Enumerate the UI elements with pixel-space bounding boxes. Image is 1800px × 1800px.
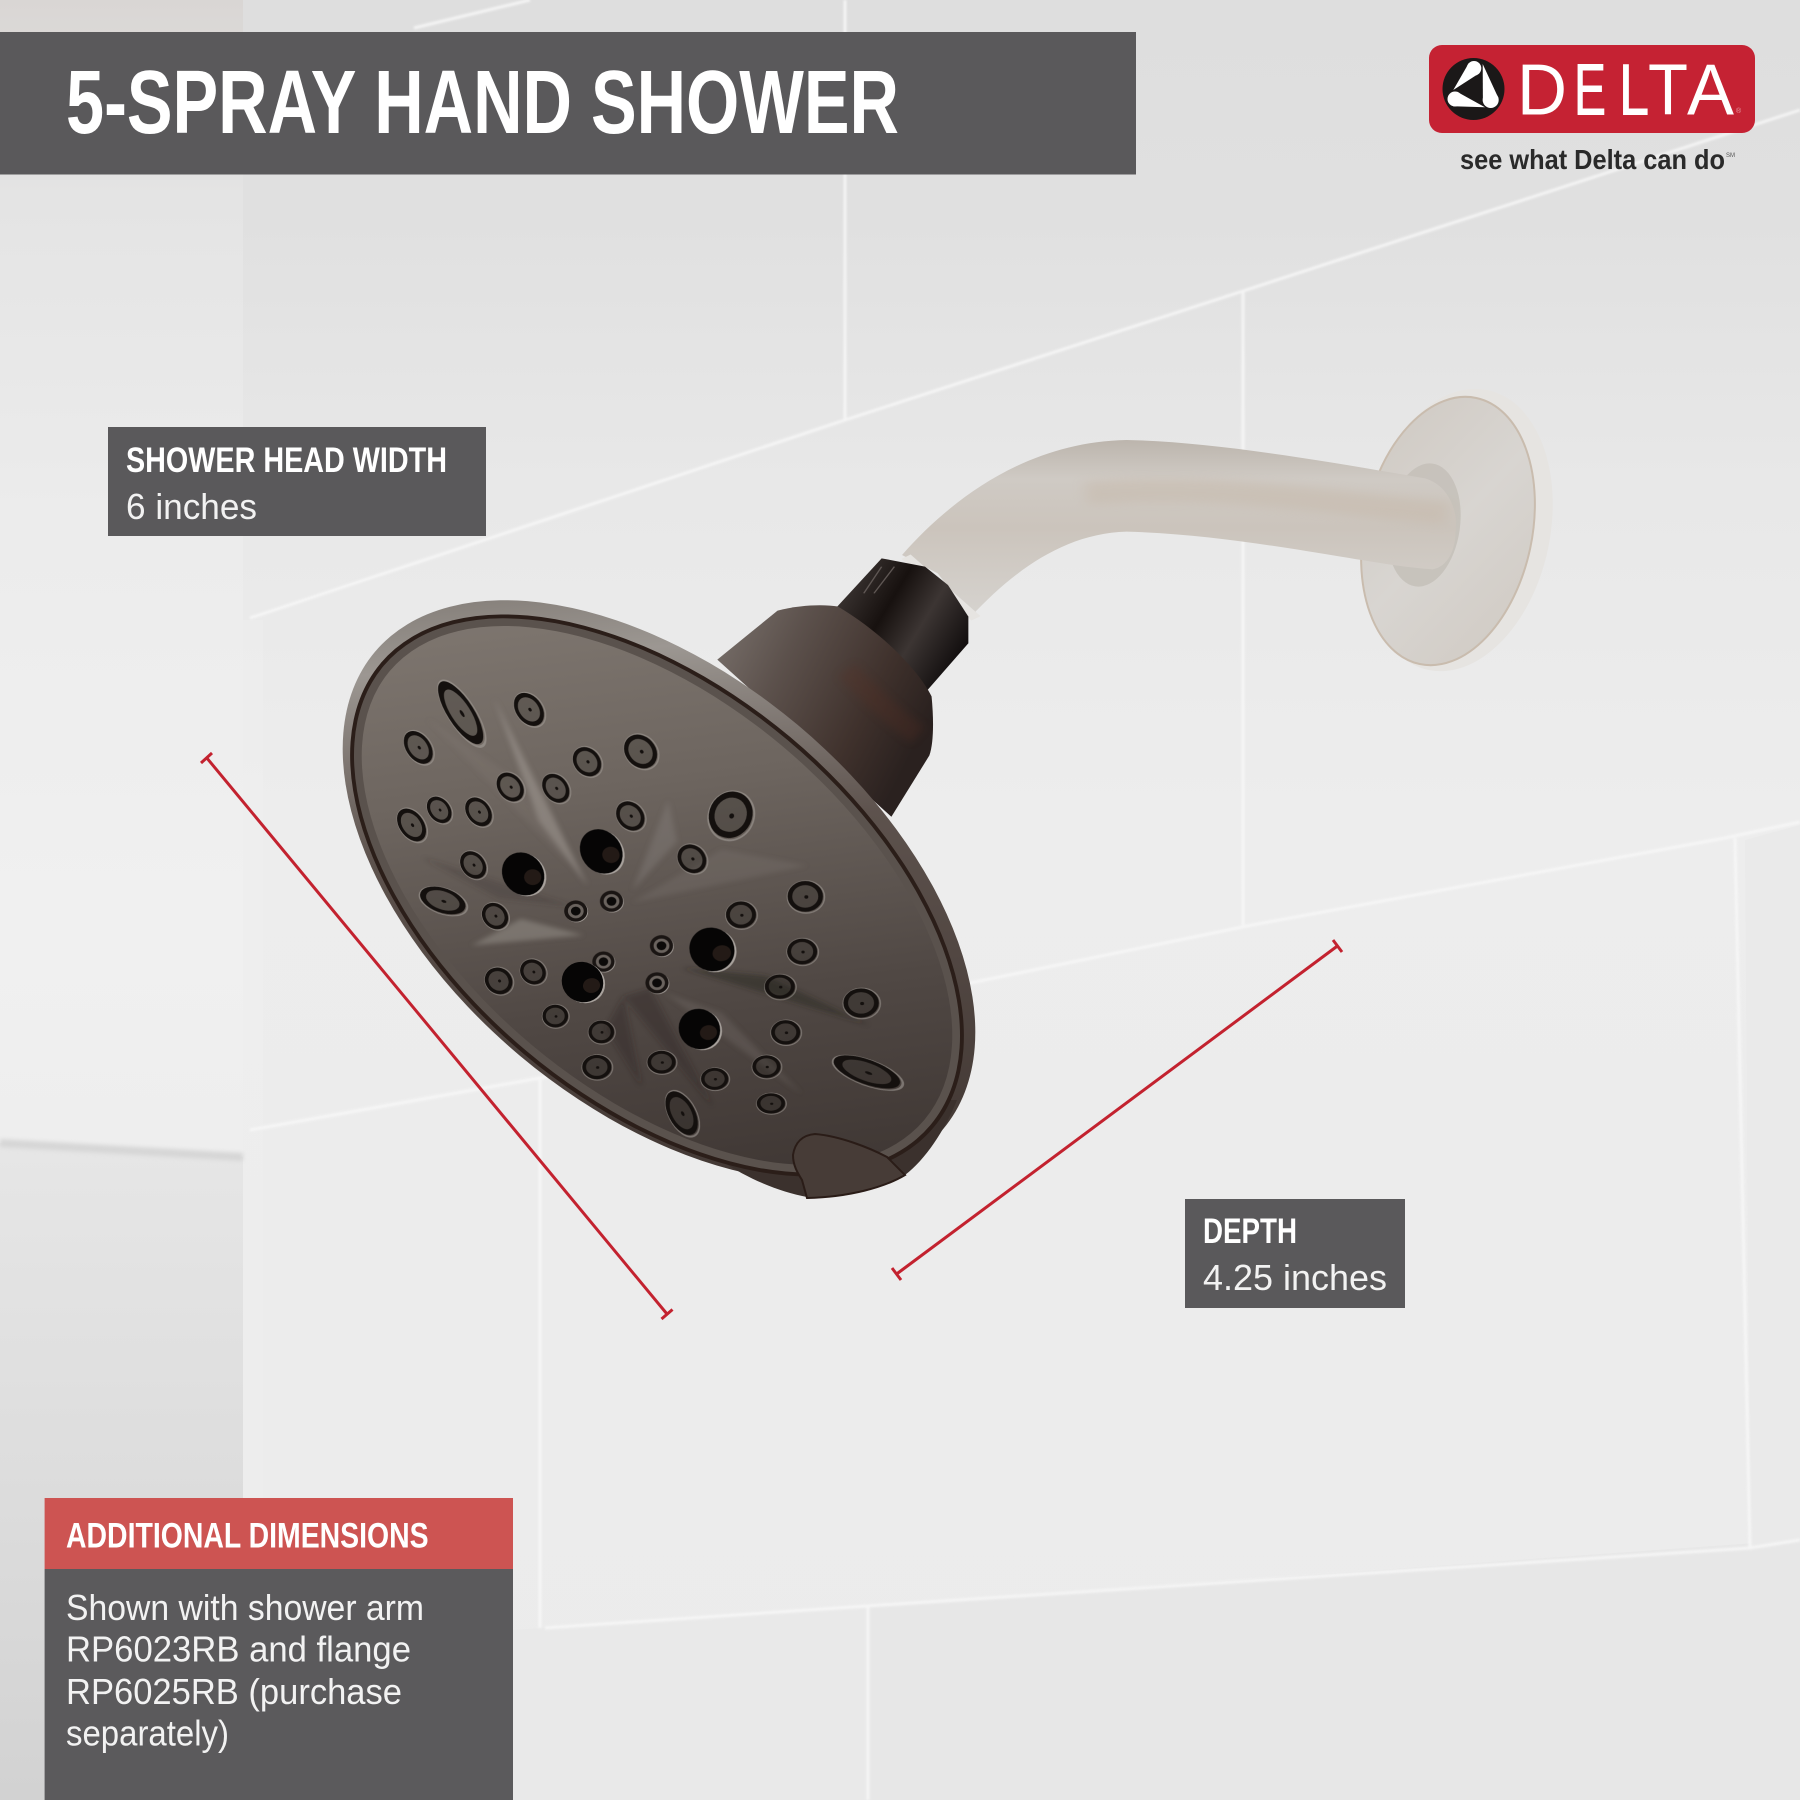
tagline: see what Delta can do — [1460, 144, 1725, 175]
Delta logo: ® — [1736, 107, 1742, 115]
panel body text: RP6025RB (purchase — [66, 1671, 402, 1712]
logo wordmark: E — [1574, 50, 1606, 130]
logo wordmark: L — [1619, 50, 1649, 130]
panel body text: Shown with shower arm — [66, 1587, 424, 1628]
star rays — [423, 698, 869, 1107]
callout: depth: DEPTH — [1203, 1212, 1297, 1251]
logo wordmark: T — [1648, 50, 1688, 130]
curved arm — [902, 440, 1456, 617]
panel body text: separately) — [66, 1713, 229, 1754]
threaded collar — [836, 558, 968, 690]
dimension line: depth — [892, 940, 1342, 1280]
logo wordmark: D — [1517, 50, 1567, 130]
panel body text: RP6023RB and flange — [66, 1629, 411, 1670]
panel body text — [66, 1587, 424, 1754]
panel heading — [45, 1498, 513, 1569]
spray selector tab — [793, 1134, 905, 1198]
head back body — [717, 605, 933, 817]
large open holes — [572, 822, 632, 882]
elongated jets — [429, 675, 494, 752]
title bar — [0, 32, 1136, 174]
panel: additional dimensions — [45, 1498, 513, 1800]
callout: shower head width: 6 inches — [126, 486, 257, 527]
logo wordmark: A — [1687, 50, 1734, 130]
panel heading: ADDITIONAL DIMENSIONS — [66, 1516, 429, 1556]
shower arm — [836, 440, 1456, 690]
lower rim edge — [720, 1100, 957, 1197]
round jets — [507, 687, 552, 732]
title bar: 5-SPRAY HAND SHOWER — [66, 53, 899, 153]
Delta logo: SM — [1726, 153, 1735, 159]
head face — [253, 511, 1061, 1280]
dimension line: width — [201, 753, 672, 1319]
flange — [1338, 371, 1578, 689]
spray nozzles — [391, 675, 908, 1141]
callout: depth: 4.25 inches — [1203, 1257, 1387, 1298]
callout: depth — [1185, 1199, 1405, 1308]
tiny center jets — [564, 900, 588, 922]
callout: shower head width: SHOWER HEAD WIDTH — [126, 441, 447, 480]
Delta logo — [1429, 45, 1755, 175]
callout: shower head width — [108, 427, 486, 536]
logo emblem — [1442, 58, 1504, 120]
shower head — [236, 487, 1082, 1294]
head outer rim — [236, 487, 1082, 1294]
logo wordmark — [1517, 50, 1734, 130]
large jet — [702, 787, 760, 845]
